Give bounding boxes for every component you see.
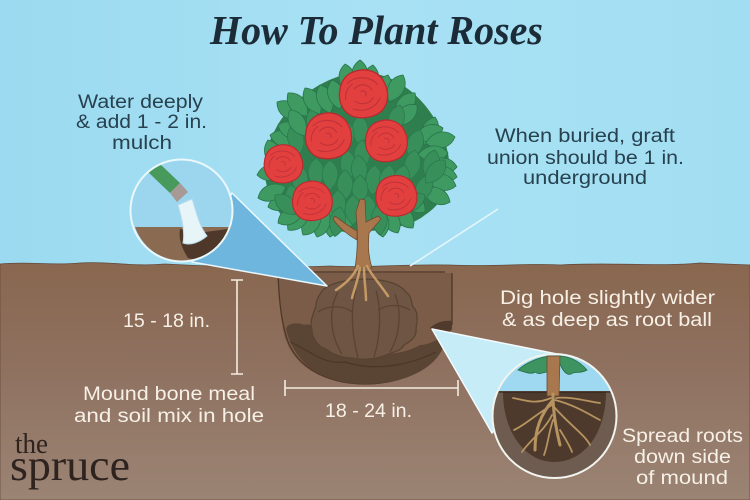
- label: spread roots: down side: [634, 447, 731, 468]
- foliage: [518, 356, 587, 374]
- graft union pointer line: [410, 209, 498, 266]
- root ball: [311, 279, 417, 359]
- rose blooms: [264, 70, 417, 221]
- label: spread roots: [622, 426, 743, 489]
- trunk: [547, 356, 560, 396]
- label: graft union: union should be 1 in.: [487, 148, 684, 169]
- soil mound: [286, 323, 443, 384]
- label: mound: [74, 384, 264, 427]
- label: graft union: [487, 126, 684, 189]
- label: water: & add 1 - 2 in.: [76, 112, 207, 133]
- label: mound: Mound bone meal: [83, 384, 255, 405]
- magnifier circle: [130, 160, 232, 262]
- circle outline: [130, 160, 232, 262]
- callout cone: [192, 193, 327, 286]
- label: graft union: When buried, graft: [495, 126, 676, 147]
- cross-section soil: [135, 227, 231, 261]
- water stream: [178, 199, 207, 244]
- label: water: [76, 92, 207, 154]
- planting hole: [278, 272, 452, 384]
- label: dig hole: & as deep as root ball: [502, 310, 712, 331]
- canopy: [255, 60, 459, 240]
- magnifier circle: [492, 354, 616, 478]
- callout: spreading roots: [432, 329, 616, 479]
- roots: [513, 394, 600, 455]
- ground: [0, 263, 750, 500]
- logo: the spruce: the: [15, 429, 48, 460]
- label: spread roots: of mound: [636, 468, 728, 489]
- label: water: mulch: [112, 133, 172, 154]
- label: hole width: 18 - 24 in.: [325, 401, 412, 422]
- label: hole depth: 15 - 18 in.: [123, 311, 210, 332]
- depth dimension marker: [231, 280, 243, 374]
- trunk and branches: [333, 199, 381, 268]
- upper roots: [336, 266, 388, 300]
- label: spread roots: Spread roots: [622, 426, 743, 447]
- sky background: [0, 0, 750, 270]
- notch in hole wall: [430, 321, 452, 339]
- label: mound: and soil mix in hole: [74, 406, 264, 427]
- rose bush: [255, 60, 459, 300]
- label: dig hole: Dig hole slightly wider: [500, 288, 716, 309]
- callout cone: [432, 329, 557, 433]
- logo: the spruce: spruce: [10, 441, 130, 490]
- cross-section soil: [492, 391, 616, 479]
- label: water: Water deeply: [78, 92, 204, 113]
- title: How To Plant Roses: [209, 7, 543, 53]
- callout: watering: [130, 160, 327, 286]
- circle outline: [492, 354, 616, 478]
- hose: [148, 164, 180, 193]
- label: dig hole: [500, 288, 716, 331]
- width dimension marker: [285, 380, 458, 396]
- label: graft union: underground: [523, 168, 647, 189]
